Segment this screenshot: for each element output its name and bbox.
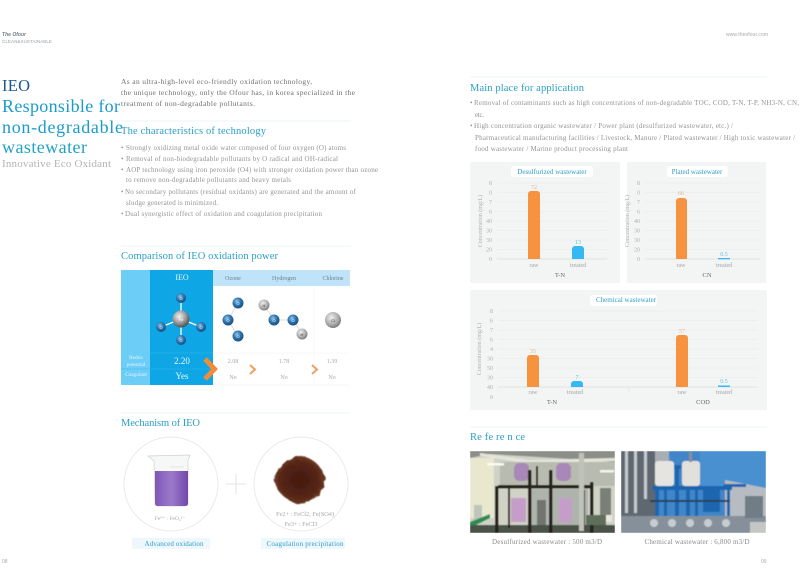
chart: chemical wastewater T-N and COD: 30 [487,356,493,362]
chart: plated wastewater CN: Concentration (mg/L) [624,195,631,247]
icon: plus [226,474,246,494]
arrow: ozone to hydrogen [250,365,255,374]
caption: desulfurized: Desulfurized wastewater : 500 m3/D [492,538,602,546]
row labels: Coagulant [125,372,147,378]
chart: plated wastewater CN: raw [676,263,686,269]
panel: coagulation precipitation: Fe2+ : FeCl2, Fe(SO4) [276,511,334,518]
table values: Yes [175,371,189,381]
chart: plated wastewater CN: treated [716,263,732,269]
icon: IEO molecule: O [179,338,183,343]
chart: chemical wastewater T-N and COD: raw [678,390,687,396]
chart: desulfurized wastewater T-N: 7 [489,200,492,206]
photo: desulfurized wastewater plant [470,451,615,533]
chart: desulfurized wastewater T-N: raw [530,263,539,269]
table values: No [280,375,288,381]
chart: plated wastewater CN: 0 [637,257,640,263]
chart: plated wastewater CN: 6 [637,210,640,216]
chart: plated wastewater CN: 20 [634,248,640,254]
chart: chemical wastewater T-N and COD: 57 [679,329,685,335]
characteristics bullet list: Strongly oxidizing metal oxide water composed of four oxygen (O) atoms [126,144,346,152]
chart: chemical wastewater T-N and COD: treated [716,390,732,396]
application bullet list: food wastewater / Marine product processing plant [475,145,628,153]
arrow: large [205,359,214,379]
icon: beaker [148,455,190,506]
chart: chemical wastewater T-N and COD: treated [567,390,583,396]
table values: 1.78 [279,359,289,365]
icon: hydrogen peroxide molecule [258,300,308,340]
chart: chemical wastewater T-N and COD: 50 [487,366,493,372]
chart: plated wastewater CN: 8 [637,181,640,187]
characteristics bullet list: • [121,188,124,196]
chart: chemical wastewater T-N and COD: 6 [490,338,493,344]
comparison table [121,270,350,385]
chart: desulfurized wastewater T-N: Concentration (mg/L) [477,195,484,247]
table values: No [328,375,336,381]
column headers: IEO [175,273,189,282]
table values: 2.20 [174,356,190,366]
chart: plated wastewater CN: 40 [634,219,640,225]
chart: plated wastewater CN [624,162,766,283]
panel: coagulation precipitation [254,437,348,549]
heading: characteristics: The characteristics of technology [121,126,267,137]
characteristics bullet list: No secondary pollutants (residual oxidants) are generated and the amount of [125,188,357,196]
heading: reference: Re fe re n ce [470,432,525,443]
column headers: Hydrogen [272,276,296,282]
column headers [175,273,344,282]
chart: chemical wastewater T-N and COD: 40 [487,385,493,391]
icon: IEO molecule: O [159,325,163,330]
table values: No [229,375,237,381]
chart: plated wastewater CN: 0 [637,190,640,196]
chart: desulfurized wastewater T-N: 0 [489,257,492,263]
page header: website: www.theofour.com [726,32,768,38]
label: Advanced oxidation [144,540,204,548]
page header: brand: The Ofour [2,32,27,38]
characteristics bullet list: Dual synergistic effect of oxidation and coagulation precipitation [125,210,322,218]
label: Coagulation precipitation [266,540,344,548]
heading: comparison: Comparison of IEO oxidation power [121,251,278,262]
main title: Innovative Eco Oxidant [2,158,111,170]
photo: chemical wastewater plant [621,451,766,533]
characteristics bullet list: Removal of non-biodegradable pollutants by O radical and OH-radical [126,155,338,163]
icon: IEO molecule: O [179,296,183,301]
icon: IEO molecule [156,293,206,345]
row labels [125,355,147,378]
application bullet list: High concentration organic wastewater / Power plant (desulfurized wastewater, etc.) / [474,122,733,130]
chart: desulfurized wastewater T-N: T-N [555,272,565,279]
icon: hydrogen peroxide molecule: O [291,318,295,323]
chart: desulfurized wastewater T-N: 13 [575,240,581,246]
chart: desulfurized wastewater T-N: 8 [489,181,492,187]
page header: brand [2,32,52,44]
row labels: Redox [129,355,143,361]
chart: plated wastewater CN: 66 [678,191,684,197]
chart: desulfurized wastewater T-N: Desulfurized wastewater [517,168,587,176]
chart: chemical wastewater T-N and COD: 35 [530,349,536,355]
chart: chemical wastewater T-N and COD: T-N [547,399,557,406]
icon: ozone molecule [222,298,244,342]
chart: chemical wastewater T-N and COD: COD [696,399,710,406]
chart: plated wastewater CN: 30 [634,238,640,244]
chart: chemical wastewater T-N and COD [470,290,767,410]
chart: chemical wastewater T-N and COD: 0.5 [720,379,728,385]
characteristics bullet list [121,144,378,218]
icon: ozone molecule: O [226,318,230,323]
chart: desulfurized wastewater T-N: 20 [486,248,492,254]
characteristics bullet list: AOP technology using iron peroxide (O4) with stronger oxidation power than ozone [126,166,378,174]
intro text [121,77,356,108]
panel: advanced oxidation: Fe⁶⁺ : FeO₄²⁻ [155,515,185,522]
table values: 2.08 [228,359,238,365]
table values: 1.39 [327,359,337,365]
panel: advanced oxidation [124,437,218,549]
chart: chemical wastewater T-N and COD: raw [528,390,538,396]
chart: desulfurized wastewater T-N: 40 [486,219,492,225]
table values [174,356,337,381]
chart: desulfurized wastewater T-N: 72 [531,185,537,191]
chart: plated wastewater CN: Plated wastewater [672,168,723,176]
icon: chlorine atom: Cl [331,318,335,323]
icon: hydrogen peroxide molecule: H [301,332,304,337]
heading: mechanism: Mechanism of IEO [121,418,200,429]
chart: chemical wastewater T-N and COD: 0 [490,395,493,401]
page number left: 08 [2,559,8,565]
chart: desulfurized wastewater T-N: treated [570,263,586,269]
intro text: the unique technology, only the Ofour has, in korea specialized in the [121,88,356,97]
chart: chemical wastewater T-N and COD: Chemical wastewater [596,296,657,304]
characteristics bullet list: • [121,210,124,218]
characteristics bullet list: • [121,144,124,152]
application bullet list: • [470,122,473,130]
chart: plated wastewater CN: CN [702,272,712,279]
icon: IEO molecule: Fe [179,317,184,322]
chart: chemical wastewater T-N and COD: 4 [490,347,493,353]
application bullet list [470,99,799,153]
chart: desulfurized wastewater T-N: 6 [489,210,492,216]
characteristics bullet list: to remove non-degradable pollutants and heavy metals [126,176,291,184]
icon: chlorine atom [325,312,341,328]
page header: brand: CLEAN&SUSTAINABLE [2,39,52,44]
column headers: Ozone [225,276,241,282]
chart: plated wastewater CN: 30 [634,228,640,234]
chart: plated wastewater CN: 7 [637,200,640,206]
page number right: 09 [761,559,767,565]
main title: IEO [2,76,30,95]
arrow: hydrogen to chlorine [312,365,317,374]
characteristics bullet list: sludge generated is minimized. [126,199,218,207]
chart: desulfurized wastewater T-N: 0 [489,190,492,196]
application bullet list: etc. [475,111,484,119]
characteristics bullet list: • [121,155,124,163]
application bullet list: • [470,99,473,107]
main title: non-degradable [2,117,123,137]
chart: desulfurized wastewater T-N: 30 [486,238,492,244]
row labels: potential [127,362,146,368]
icon: ozone molecule: O [236,301,240,306]
intro text: As an ultra-high-level eco-friendly oxidation technology, [121,77,312,86]
icon: IEO molecule: O [199,325,203,330]
main title [2,76,123,170]
main title: Responsible for [2,96,120,116]
chart: chemical wastewater T-N and COD: 6 [490,318,493,324]
chart: plated wastewater CN: 0.5 [720,252,728,258]
chart: chemical wastewater T-N and COD: 7 [576,375,578,381]
chart: chemical wastewater T-N and COD: Concentration (mg/L) [476,323,483,375]
chart: desulfurized wastewater T-N [470,162,620,283]
icon: iron powder pile [274,456,325,504]
chart: chemical wastewater T-N and COD: 30 [487,376,493,382]
chart: desulfurized wastewater T-N: 30 [486,228,492,234]
icon: hydrogen peroxide molecule: O [272,318,276,323]
caption: chemical: Chemical wastewater : 6,800 m3/D [644,538,750,546]
application bullet list: Removal of contaminants such as high concentrations of non-degradable TOC, COD, T-N, T-P, NH3-N, CN, [474,99,799,107]
column headers: Chlorine [322,276,344,282]
main title: wastewater [2,137,87,157]
panel: coagulation precipitation: Fe3+ : FeCl3 [284,521,318,528]
icon: ozone molecule: O [236,334,240,339]
characteristics bullet list: • [121,166,124,174]
chart: chemical wastewater T-N and COD: 7 [490,328,493,334]
icon: hydrogen peroxide molecule: H [263,303,266,308]
chart: chemical wastewater T-N and COD: 8 [490,309,493,315]
intro text: treatment of non-degradable pollutants. [121,99,255,108]
heading: main place for application: Main place for application [470,83,585,94]
application bullet list: Pharmaceutical manufacturing facilities / Livestock, Manure / Plated wastewater / High toxic wastewater / [475,134,795,142]
